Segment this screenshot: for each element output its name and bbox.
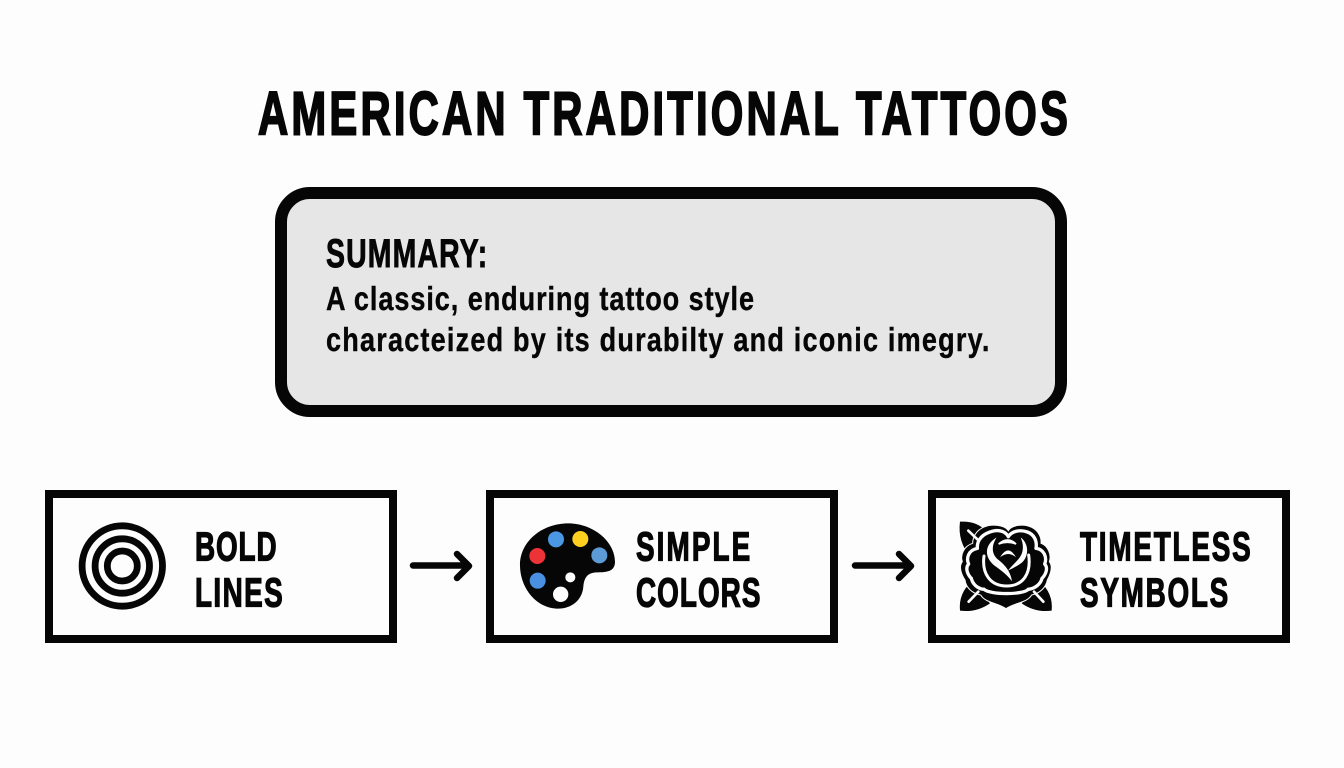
arrow: simple colors to timeless symbols bbox=[855, 554, 911, 578]
label: timeless symbols bbox=[1080, 524, 1251, 616]
panel: timeless symbols bbox=[932, 494, 1286, 639]
summary heading: SUMMARY: bbox=[326, 233, 487, 276]
summary text: characteized by its durabilty and iconic imegry. bbox=[326, 323, 989, 359]
label: timeless symbols: SYMBOLS bbox=[1080, 570, 1228, 616]
arrow: bold lines to simple colors bbox=[413, 554, 469, 578]
label: bold lines bbox=[195, 524, 283, 616]
label: simple colors: COLORS bbox=[636, 570, 760, 616]
icon: rose bbox=[960, 522, 1052, 611]
label: bold lines: BOLD bbox=[195, 524, 277, 570]
panel: summary bbox=[281, 193, 1061, 411]
label: simple colors: SIMPLE bbox=[636, 524, 750, 570]
summary text: A classic, enduring tattoo style bbox=[326, 282, 754, 318]
label: timeless symbols: TIMETLESS bbox=[1080, 524, 1251, 570]
panel: bold lines bbox=[49, 494, 393, 639]
title: AMERICAN TRADITIONAL TATTOOS bbox=[258, 79, 1068, 148]
icon: concentric circles bbox=[82, 526, 162, 606]
summary text bbox=[326, 282, 989, 359]
icon: palette bbox=[520, 523, 615, 609]
label: bold lines: LINES bbox=[195, 570, 283, 616]
panel: simple colors bbox=[490, 494, 834, 639]
label: simple colors bbox=[636, 524, 760, 616]
